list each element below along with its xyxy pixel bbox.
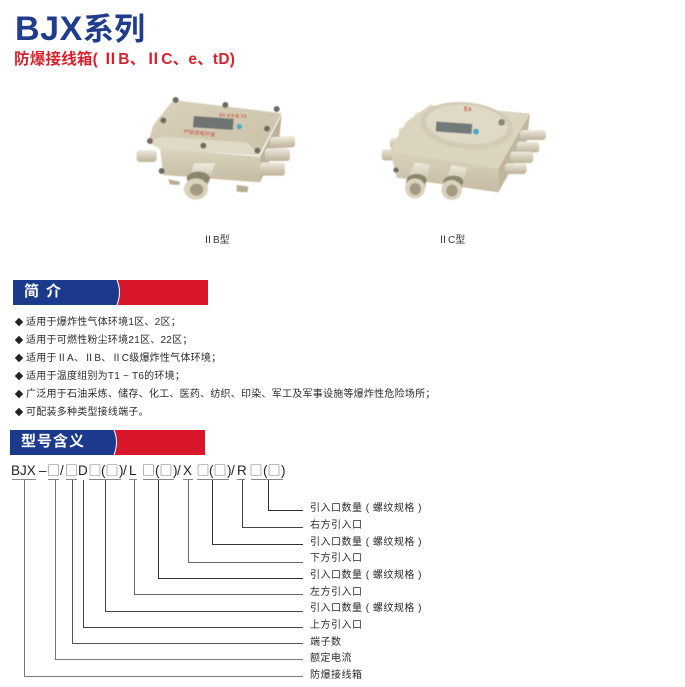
model code string: □ bbox=[250, 460, 263, 479]
model code string: □ bbox=[88, 460, 102, 479]
model code string: □ bbox=[160, 460, 173, 479]
model code string: □ bbox=[268, 460, 281, 479]
bullet list: intro: 适用于ⅡA、ⅡB、ⅡC级爆炸性气体环境； bbox=[26, 353, 221, 364]
model code labels: 额定电流 bbox=[310, 653, 352, 664]
model code string: D bbox=[78, 463, 88, 478]
model code diagram bbox=[11, 460, 303, 677]
model code string: / bbox=[231, 463, 235, 478]
model code labels: 左方引入口 bbox=[310, 587, 362, 598]
model code string: ( bbox=[263, 463, 268, 478]
model code string: / bbox=[177, 463, 181, 478]
model code string: ) bbox=[119, 463, 124, 478]
bullet list: intro: 适用于温度组别为T1 ~ T6的环境； bbox=[26, 371, 185, 382]
model code string: □ bbox=[65, 460, 78, 479]
title: BJX系列 bbox=[15, 10, 145, 48]
caption: IIC: ⅡC型 bbox=[438, 235, 465, 246]
model code labels: 下方引入口 bbox=[310, 553, 362, 564]
model code string: □ bbox=[106, 460, 119, 479]
model code string: ( bbox=[155, 463, 160, 478]
model code labels: 引入口数量 ( 螺纹规格 ) bbox=[310, 537, 422, 548]
leader lines bbox=[24, 480, 303, 676]
model code string: □ bbox=[47, 460, 60, 479]
model code string: ) bbox=[173, 463, 178, 478]
bullet list: intro: 适用于可燃性粉尘环境21区、22区； bbox=[26, 335, 193, 346]
product photo: IIB junction box: Ex d II B T4 bbox=[219, 112, 247, 120]
model code string bbox=[11, 460, 286, 479]
model code labels: 防爆接线箱 bbox=[310, 670, 362, 681]
model code labels: 引入口数量 ( 螺纹规格 ) bbox=[310, 570, 422, 581]
model code string: – bbox=[39, 463, 47, 478]
model code string: X bbox=[183, 463, 192, 478]
section heading: intro: 简介 bbox=[24, 283, 68, 300]
model code string: □ bbox=[214, 460, 227, 479]
model code string: R bbox=[237, 463, 247, 478]
model code labels: 上方引入口 bbox=[310, 620, 362, 631]
model code labels: 引入口数量 ( 螺纹规格 ) bbox=[310, 603, 422, 614]
bullet list: intro: 适用于爆炸性气体环境1区、2区； bbox=[26, 317, 181, 328]
product photo: IIB junction box: 严禁带电开盖 bbox=[183, 128, 216, 139]
model code string: ) bbox=[281, 463, 286, 478]
bullet list: intro: 广泛用于石油采炼、储存、化工、医药、纺织、印染、军工及军事设施等爆炸性危险场所； bbox=[26, 389, 436, 400]
model code labels: 引入口数量 ( 螺纹规格 ) bbox=[310, 503, 422, 514]
model code string: □ bbox=[142, 460, 155, 479]
bullet list: intro: 可配装多种类型接线端子。 bbox=[26, 407, 149, 418]
model code string: BJX bbox=[11, 463, 36, 478]
product photo: IIB junction box bbox=[136, 96, 296, 200]
model code string: ( bbox=[101, 463, 106, 478]
caption: IIB: ⅡB型 bbox=[203, 235, 230, 246]
model code labels bbox=[310, 502, 422, 681]
model code string: L bbox=[129, 463, 137, 478]
model code string: □ bbox=[196, 460, 210, 479]
model code string: ( bbox=[209, 463, 214, 478]
section heading: intro bbox=[13, 280, 208, 305]
model code string: / bbox=[123, 463, 127, 478]
section heading: model meaning: 型号含义 bbox=[21, 433, 85, 450]
bullet list: intro bbox=[14, 316, 436, 418]
model code labels: 右方引入口 bbox=[310, 520, 362, 531]
product photo: IIC junction box bbox=[381, 102, 546, 200]
product photo: IIC junction box: Ex bbox=[464, 106, 472, 113]
model code string: / bbox=[60, 463, 64, 478]
model code labels: 端子数 bbox=[310, 637, 342, 648]
section heading: model meaning bbox=[10, 430, 205, 455]
subtitle: 防爆接线箱( ⅡB、ⅡC、e、tD) bbox=[14, 51, 235, 68]
model code string: ) bbox=[227, 463, 232, 478]
